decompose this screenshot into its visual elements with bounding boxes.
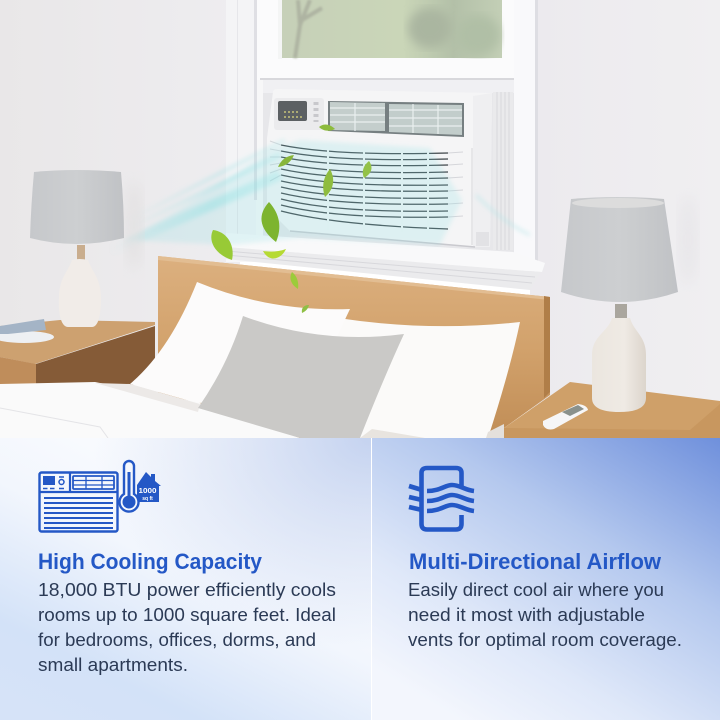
- heading: multi-directional airflow: Multi-Directional Airflow: [409, 549, 662, 574]
- icon: air conditioner: [39, 472, 118, 532]
- pillow back left: [130, 282, 350, 403]
- heading: high cooling capacity: High Cooling Capacity: [38, 549, 263, 574]
- window sill: [226, 233, 545, 290]
- duvet: [0, 382, 300, 438]
- window glass: [282, 0, 502, 58]
- text: high cooling capacity description: rooms up to 1000 square feet. Ideal: [38, 605, 336, 625]
- text: high cooling capacity description: 18,000 BTU power efficiently cools: [38, 580, 336, 600]
- photo: bedroom scene: [0, 0, 720, 438]
- nightstand left: [0, 319, 155, 388]
- window frame: [226, 0, 538, 262]
- icon: house 1000 sq ft: [137, 472, 161, 502]
- wall: [0, 0, 720, 438]
- panel: multi-directional airflow background: [372, 438, 720, 720]
- leaves: [211, 125, 371, 313]
- icon: thermometer: [120, 461, 138, 512]
- panel: high cooling capacity background: [0, 438, 371, 720]
- text: high cooling capacity description: for bedrooms, offices, dorms, and: [38, 630, 316, 650]
- lamp right: [561, 197, 678, 412]
- headboard: [158, 256, 550, 438]
- text: multi-directional airflow description: vents for optimal room coverage.: [408, 630, 682, 650]
- lamp left: [30, 170, 143, 327]
- grey cushion: [198, 316, 404, 438]
- AC unit: [267, 89, 492, 247]
- icon: house 1000 sq ft: 1000: [138, 486, 156, 495]
- remote control: [543, 404, 588, 430]
- nightstand right: [504, 382, 720, 438]
- top vents: [328, 101, 464, 137]
- pillow back right: [330, 318, 520, 438]
- icon: house 1000 sq ft: sq ft: [142, 496, 153, 502]
- icon: air conditioner with thermometer and house: [39, 461, 161, 532]
- control panel: [274, 98, 324, 130]
- louvre grille: [281, 145, 448, 229]
- text: multi-directional airflow description: Easily direct cool air where you: [408, 580, 664, 600]
- text: high cooling capacity description: small apartments.: [38, 655, 188, 675]
- text: multi-directional airflow description: [408, 580, 682, 650]
- airflow streams: [110, 140, 530, 250]
- text: high cooling capacity description: [38, 580, 336, 675]
- louvre extensions: [270, 141, 463, 217]
- icon: airflow vent: [409, 468, 474, 530]
- text: multi-directional airflow description: need it most with adjustable: [408, 605, 645, 625]
